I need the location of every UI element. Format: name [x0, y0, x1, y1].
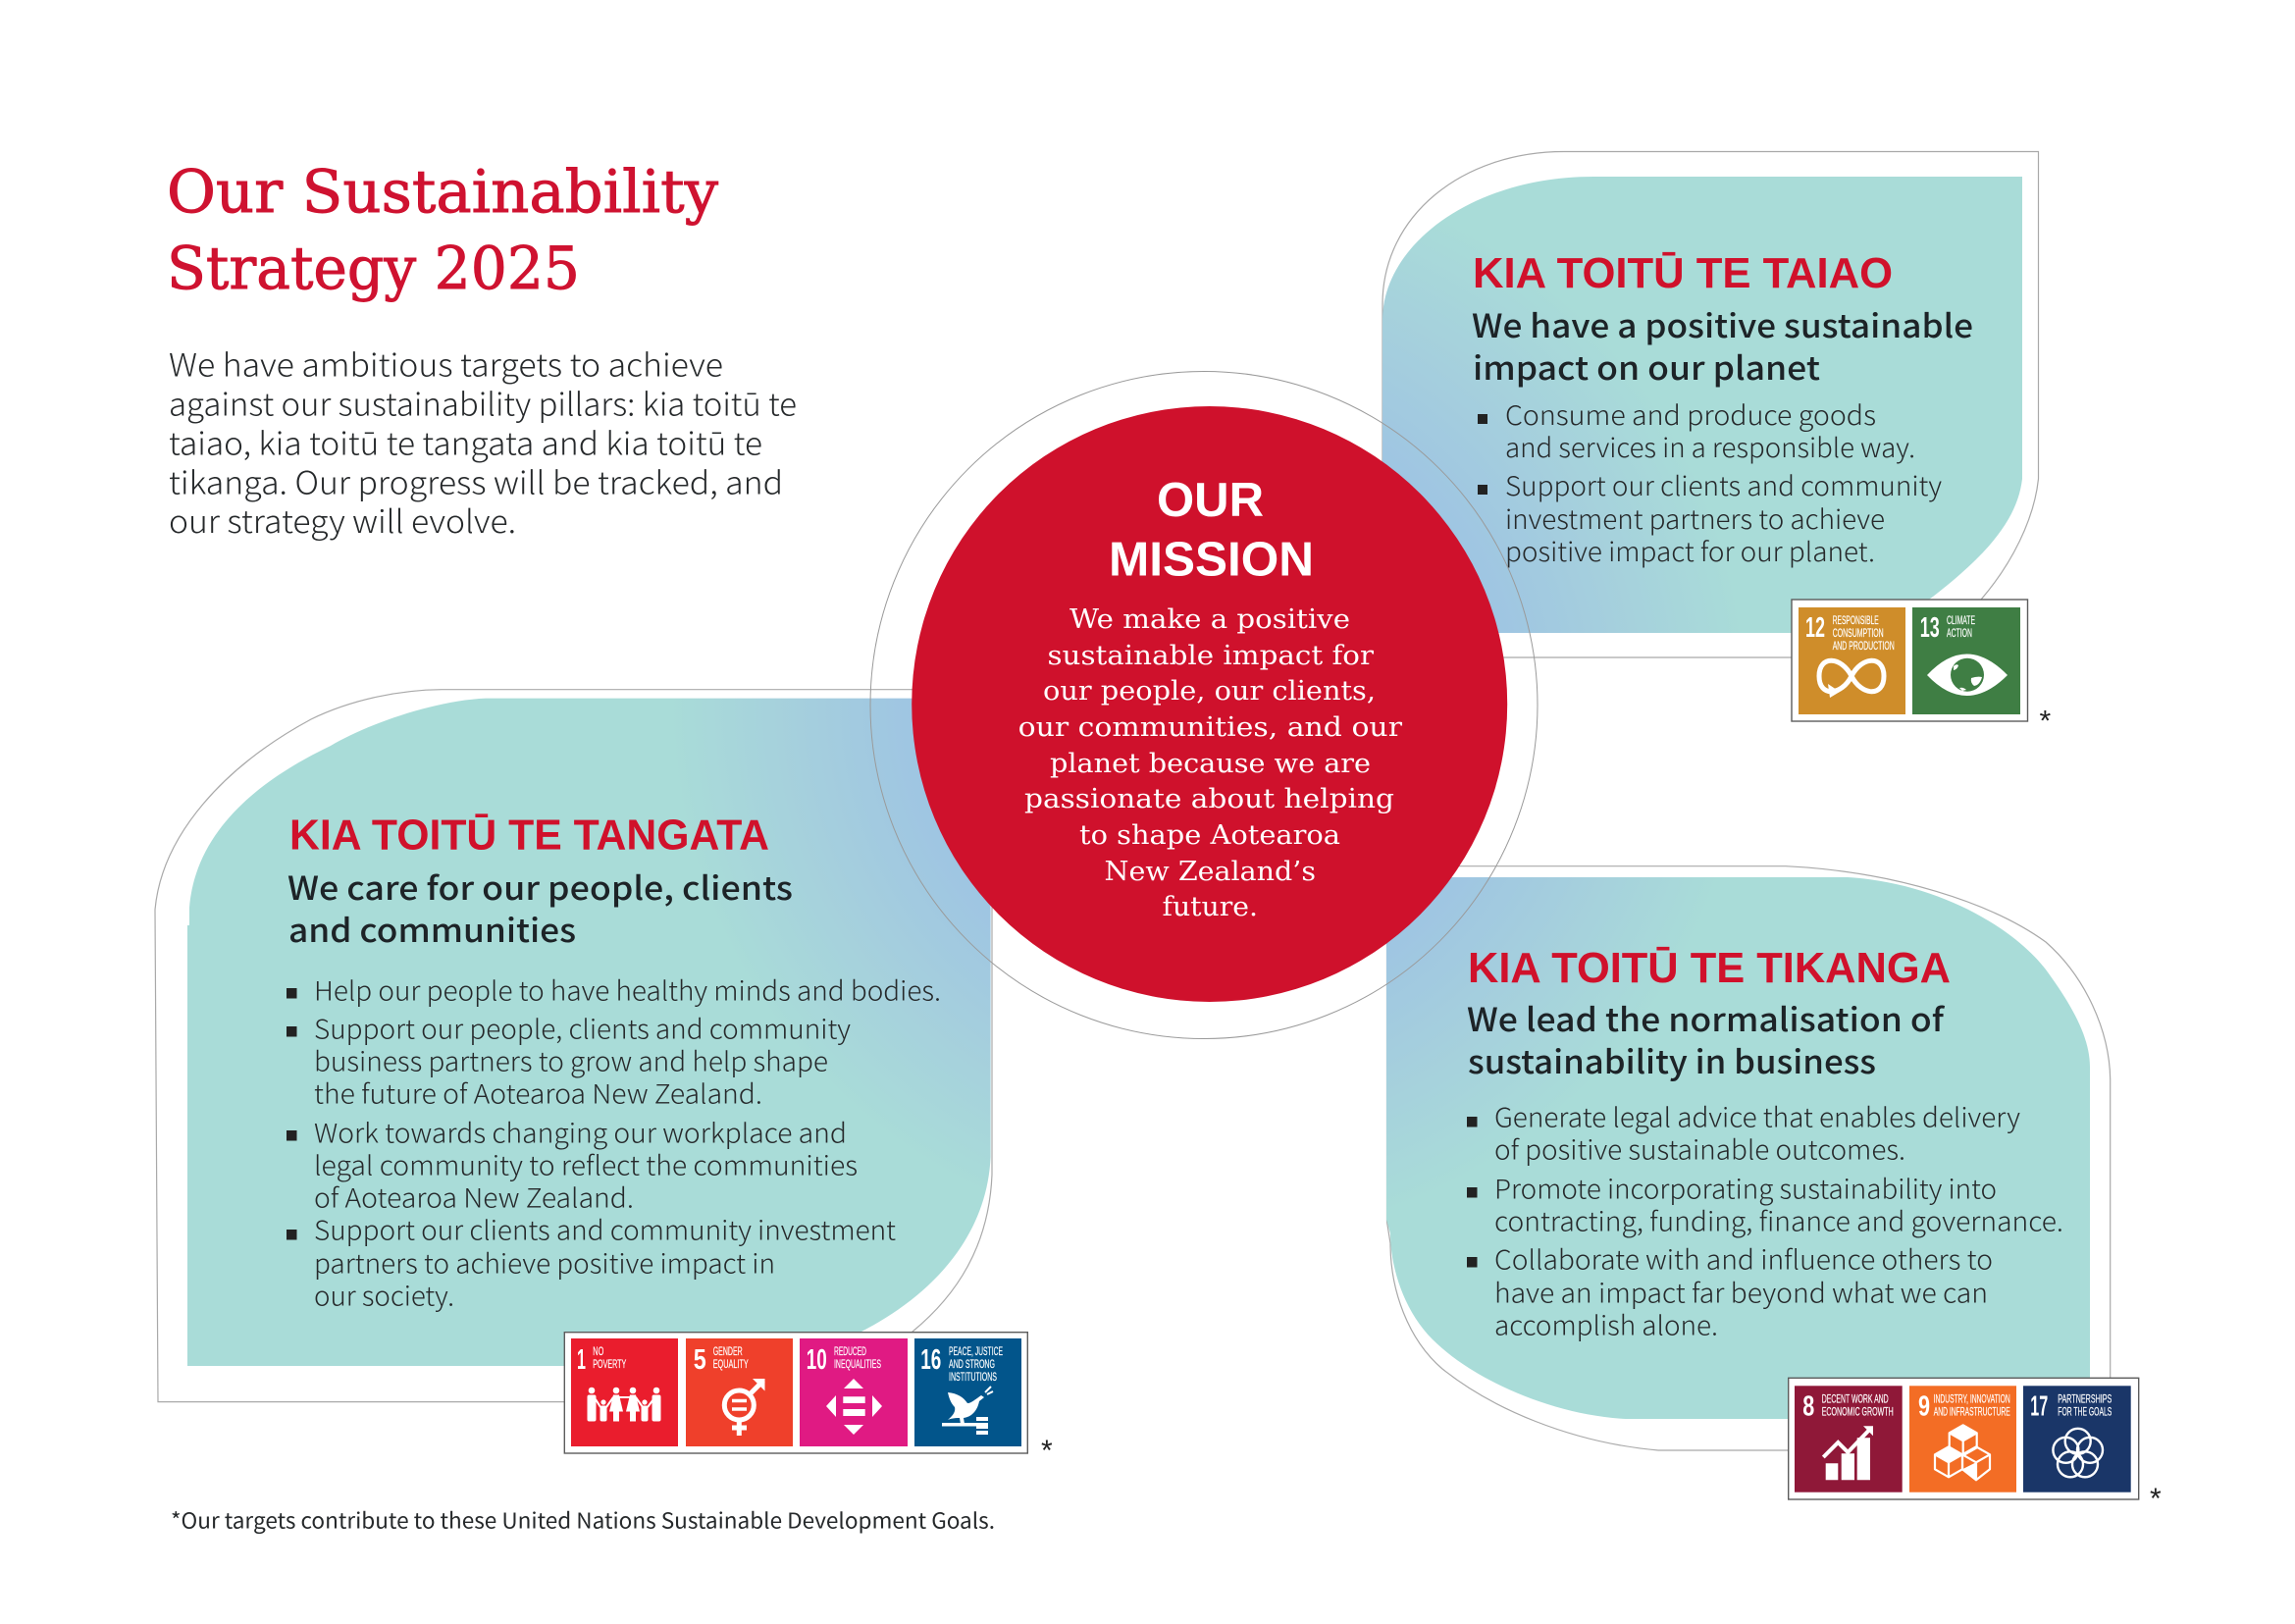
intro text: our strategy will evolve. [169, 498, 516, 543]
SDG tile 10: INEQUALITIES [834, 1357, 881, 1371]
panel: kia toitu te tikanga [1386, 866, 2162, 1515]
title: Our Sustainability [167, 158, 718, 227]
SDG tile 8: ECONOMIC GROWTH [1822, 1404, 1894, 1418]
SDG tile 1: 1 [577, 1344, 586, 1376]
mission heading: OUR [1157, 474, 1264, 527]
SDG tile 17: FOR THE GOALS [2058, 1404, 2112, 1418]
bullet list: tikanga: accomplish alone. [1494, 1305, 1718, 1342]
SDG tile 13: ACTION [1947, 626, 1972, 640]
SDG tile 10 [800, 1338, 908, 1446]
SDG tile 1: NO [593, 1344, 603, 1358]
bullet list: tangata: partners to achieve positive impact in [314, 1242, 775, 1282]
bullet list: taiao: and services in a responsible way. [1505, 427, 1915, 465]
SDG tile 10: 10 [807, 1344, 827, 1376]
bullet list: taiao [1478, 394, 1942, 569]
SDG tile 5: GENDER [713, 1344, 743, 1358]
bullet list: tikanga [1467, 1097, 2063, 1342]
SDG tile 9 [1909, 1386, 2016, 1493]
SDG tile 8: DECENT WORK AND [1822, 1391, 1889, 1405]
bullet list: tangata: of Aotearoa New Zealand. [314, 1178, 634, 1215]
SDG tile 17: 17 [2030, 1390, 2048, 1422]
mission statement: future. [1162, 892, 1258, 922]
heading: tangata: KIA TOITŪ TE TANGATA [289, 811, 769, 860]
bullet list: taiao: Consume and produce goods [1505, 394, 1876, 433]
mission heading: MISSION [1109, 534, 1314, 587]
SDG tile 13 [1912, 607, 2020, 714]
footnote: *Our targets contribute to these United Nations Sustainable Development Goals. [171, 1503, 995, 1535]
subheading: taiao: We have a positive sustainable [1472, 300, 1973, 347]
SDG tile 8: 8 [1802, 1390, 1814, 1422]
heading: taiao: KIA TOITŪ TE TAIAO [1473, 249, 1893, 297]
asterisk: * [2150, 1483, 2162, 1515]
bullet list: tangata: our society. [314, 1276, 454, 1313]
subheading: tangata [287, 863, 793, 952]
bullet list: tangata: Support our clients and community investment [314, 1209, 896, 1248]
asterisk: * [2039, 705, 2051, 738]
heading: tikanga: KIA TOITŪ TE TIKANGA [1468, 944, 1951, 992]
SDG tile 1: POVERTY [593, 1357, 626, 1371]
SDG tile 16: AND STRONG [949, 1357, 995, 1371]
outer ring [870, 371, 1538, 1038]
bullet list: tikanga: Collaborate with and influence others to [1494, 1238, 1993, 1278]
SDG badges: 1, 5, 10 and 16 [564, 1333, 1027, 1453]
mission statement: to shape Aotearoa [1079, 820, 1340, 851]
title: Strategy 2025 [167, 235, 580, 303]
subheading: taiao: impact on our planet [1473, 342, 1820, 390]
mission circle [912, 406, 1507, 1002]
intro text: against our sustainability pillars: kia toitū te [169, 381, 797, 426]
SDG tile 5 [686, 1338, 793, 1446]
panel: kia toitu te taiao [1382, 151, 2051, 738]
bullet list: taiao: Support our clients and community [1505, 465, 1942, 503]
mission statement: New Zealand’s [1105, 857, 1316, 887]
SDG tile 12: RESPONSIBLE [1833, 613, 1879, 627]
SDG tile 9: INDUSTRY, INNOVATION [1934, 1391, 2010, 1405]
bullet list: tangata: the future of Aotearoa New Zealand. [314, 1074, 762, 1111]
bullet list: tikanga: of positive sustainable outcomes. [1494, 1128, 1905, 1168]
mission statement: our people, our clients, [1043, 676, 1376, 707]
subheading: tangata: We care for our people, clients [287, 863, 793, 910]
bullet list: tangata: legal community to reflect the communities [314, 1144, 858, 1183]
SDG tile 16: 16 [920, 1344, 941, 1376]
bullet list: taiao: positive impact for our planet. [1505, 531, 1875, 569]
SDG tile 5: 5 [694, 1344, 706, 1376]
bullet list: tangata: Help our people to have healthy minds and bodies. [314, 969, 941, 1009]
mission heading [1109, 474, 1314, 587]
bullet list: tikanga: Generate legal advice that enables delivery [1494, 1097, 2020, 1134]
SDG tile 13: 13 [1920, 612, 1940, 644]
SDG tile 16 [914, 1338, 1021, 1446]
SDG tile 8 [1795, 1386, 1903, 1493]
SDG tile 13: CLIMATE [1947, 613, 1975, 627]
SDG tile 1 [571, 1338, 678, 1446]
SDG tile 10: REDUCED [834, 1344, 866, 1358]
mission statement: planet because we are [1050, 749, 1371, 779]
bullet list: tikanga: have an impact far beyond what we can [1494, 1272, 1988, 1311]
SDG tile 9: AND INFRASTRUCTURE [1934, 1404, 2010, 1418]
intro text [169, 341, 797, 543]
SDG badges: 8, 9 and 17 [1789, 1378, 2139, 1499]
bullet list: tangata: Work towards changing our workplace and [314, 1113, 847, 1150]
bullet list: tangata: Support our people, clients and community [314, 1009, 851, 1046]
mission statement: sustainable impact for [1048, 641, 1374, 671]
mission statement: passionate about helping [1024, 784, 1394, 814]
subheading: tikanga: We lead the normalisation of [1467, 994, 1946, 1041]
title [167, 158, 718, 303]
subheading: tikanga: sustainability in business [1468, 1036, 1876, 1083]
intro text: We have ambitious targets to achieve [169, 341, 723, 387]
SDG tile 5: EQUALITY [713, 1357, 749, 1371]
bullet list: tangata [287, 969, 941, 1313]
subheading: taiao [1472, 300, 1973, 390]
SDG tile 12: CONSUMPTION [1833, 626, 1884, 640]
intro text: taiao, kia toitū te tangata and kia toitū te [169, 420, 762, 465]
bullet list: tikanga: contracting, funding, finance and governance. [1494, 1201, 2063, 1238]
SDG tile 16: INSTITUTIONS [949, 1370, 997, 1384]
subheading: tangata: and communities [288, 905, 576, 952]
SDG tile 17: PARTNERSHIPS [2058, 1391, 2112, 1405]
asterisk: * [1041, 1435, 1053, 1467]
SDG tile 17 [2023, 1386, 2131, 1493]
SDG tile 16: PEACE, JUSTICE [949, 1344, 1003, 1358]
SDG tile 12: AND PRODUCTION [1833, 639, 1895, 653]
SDG badges: 12 and 13 [1792, 600, 2027, 721]
panel: kia toitu te tangata [155, 690, 1053, 1467]
SDG tile 9: 9 [1918, 1390, 1930, 1422]
mission statement: our communities, and our [1018, 712, 1402, 743]
intro text: tikanga. Our progress will be tracked, and [169, 459, 783, 504]
mission statement [1018, 604, 1402, 922]
SDG tile 12 [1799, 607, 1905, 714]
bullet list: tikanga: Promote incorporating sustainability into [1494, 1168, 1997, 1207]
bullet list: taiao: investment partners to achieve [1505, 498, 1885, 537]
SDG tile 12: 12 [1805, 612, 1825, 644]
mission statement: We make a positive [1069, 604, 1350, 635]
bullet list: tangata: business partners to grow and help shape [314, 1040, 828, 1079]
subheading: tikanga [1467, 994, 1946, 1083]
